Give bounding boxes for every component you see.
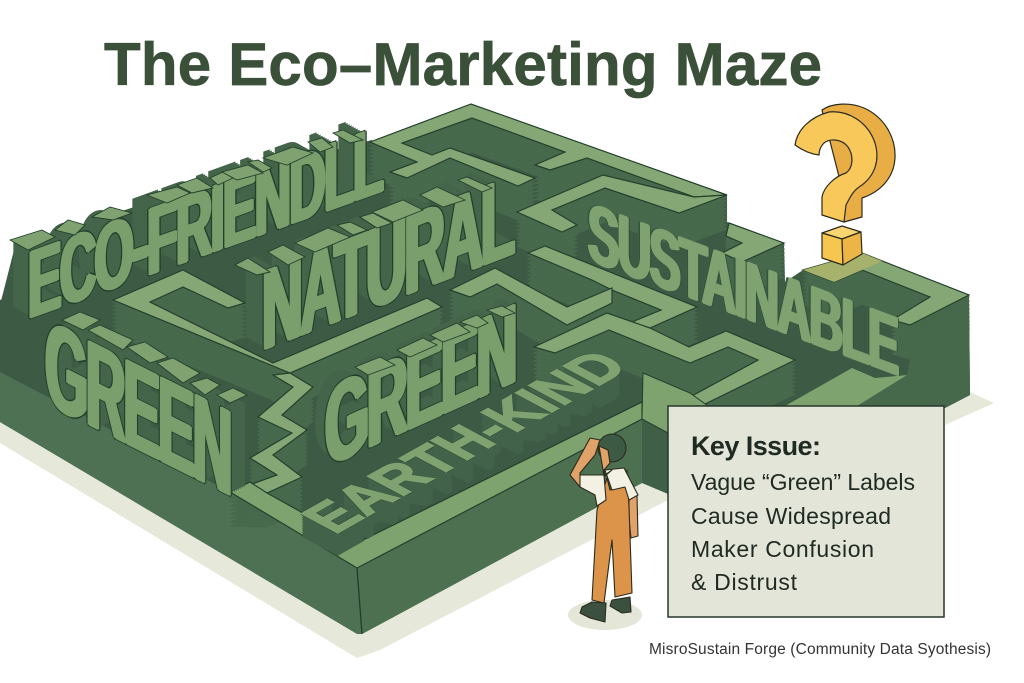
question mark back [822,104,895,222]
worker raised arm [570,438,600,487]
maze word: center GREEN: GREEN [325,280,515,491]
maze word: EARTH-KIND: EARTH-KIND [287,342,642,541]
callout panel [668,406,944,617]
maze path tops [113,104,969,493]
right block outer wall [785,295,970,408]
callout body text [691,469,915,595]
question mark front [795,112,877,222]
floor behind back word [0,140,372,305]
title: The Eco–Marketing Maze [104,31,822,98]
callout body text: & Distrust [691,569,798,595]
ground shadow [0,400,668,658]
front rim [230,402,642,568]
left outer wall [0,372,362,634]
worker shirt [579,468,638,506]
corner patch [642,373,708,433]
maze word: NATURAL: NATURAL [262,152,513,375]
callout body text: Maker Confusion [691,536,874,562]
worker figure [568,434,642,630]
cube top [822,226,861,239]
cube right face [842,232,862,265]
maze wall extrusions [113,106,969,527]
maze word: ECO-FRIENDLL: ECO-FRIENDLL [28,105,382,340]
letter top faces [10,130,515,403]
icon: question mark [795,104,895,265]
worker boots [580,597,631,622]
right block yellow tint [803,253,882,282]
front outer wall [357,419,642,634]
maze floor [0,104,970,634]
worker overalls [592,470,632,603]
cube left face [822,233,843,265]
maze word: left GREEN: GREEN [45,293,230,522]
callout heading: Key Issue: [691,431,821,461]
worker right arm [629,495,638,538]
source credit: MisroSustain Forge (Community Data Syothesis) [649,641,991,658]
worker hair [598,434,626,462]
lower right path [785,368,907,406]
worker face [599,446,612,476]
callout body text: Cause Widespread [691,503,891,529]
inner corner wall [642,420,668,494]
shadow at right of maze [945,392,994,425]
callout: key issue [668,406,944,617]
callout body text: Vague “Green” Labels [691,469,915,495]
front corner edge [357,568,362,634]
maze word: SUSTAINABLE: SUSTAINABLE [588,185,897,393]
worker ground shadow [568,600,642,630]
